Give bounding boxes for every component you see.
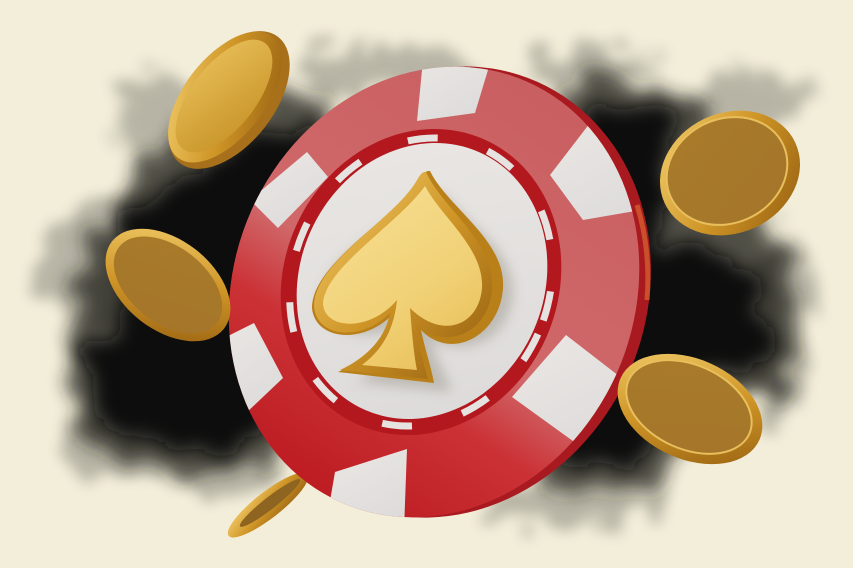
dark smoke core — [80, 95, 765, 470]
light smoke wisps — [40, 45, 810, 527]
chip face — [158, 1, 710, 568]
inner white face — [253, 103, 591, 459]
mid smoke — [70, 70, 790, 490]
spade face — [323, 186, 482, 370]
inner ring — [232, 84, 610, 480]
edge highlight — [637, 205, 648, 300]
ring dashes — [244, 96, 598, 468]
coin: lower right — [600, 332, 780, 486]
coin: top left — [144, 9, 314, 191]
coin: bottom left, behind chip — [221, 464, 315, 546]
spade body — [312, 171, 503, 383]
spade rim — [314, 172, 492, 379]
spade shadow — [322, 190, 513, 392]
coin: left — [84, 206, 252, 364]
smoke cloud — [40, 45, 810, 527]
chip stripes — [230, 66, 632, 517]
spade — [312, 171, 503, 383]
poker chip — [228, 66, 651, 518]
chip edge — [166, 0, 722, 568]
coin: right — [639, 88, 821, 258]
